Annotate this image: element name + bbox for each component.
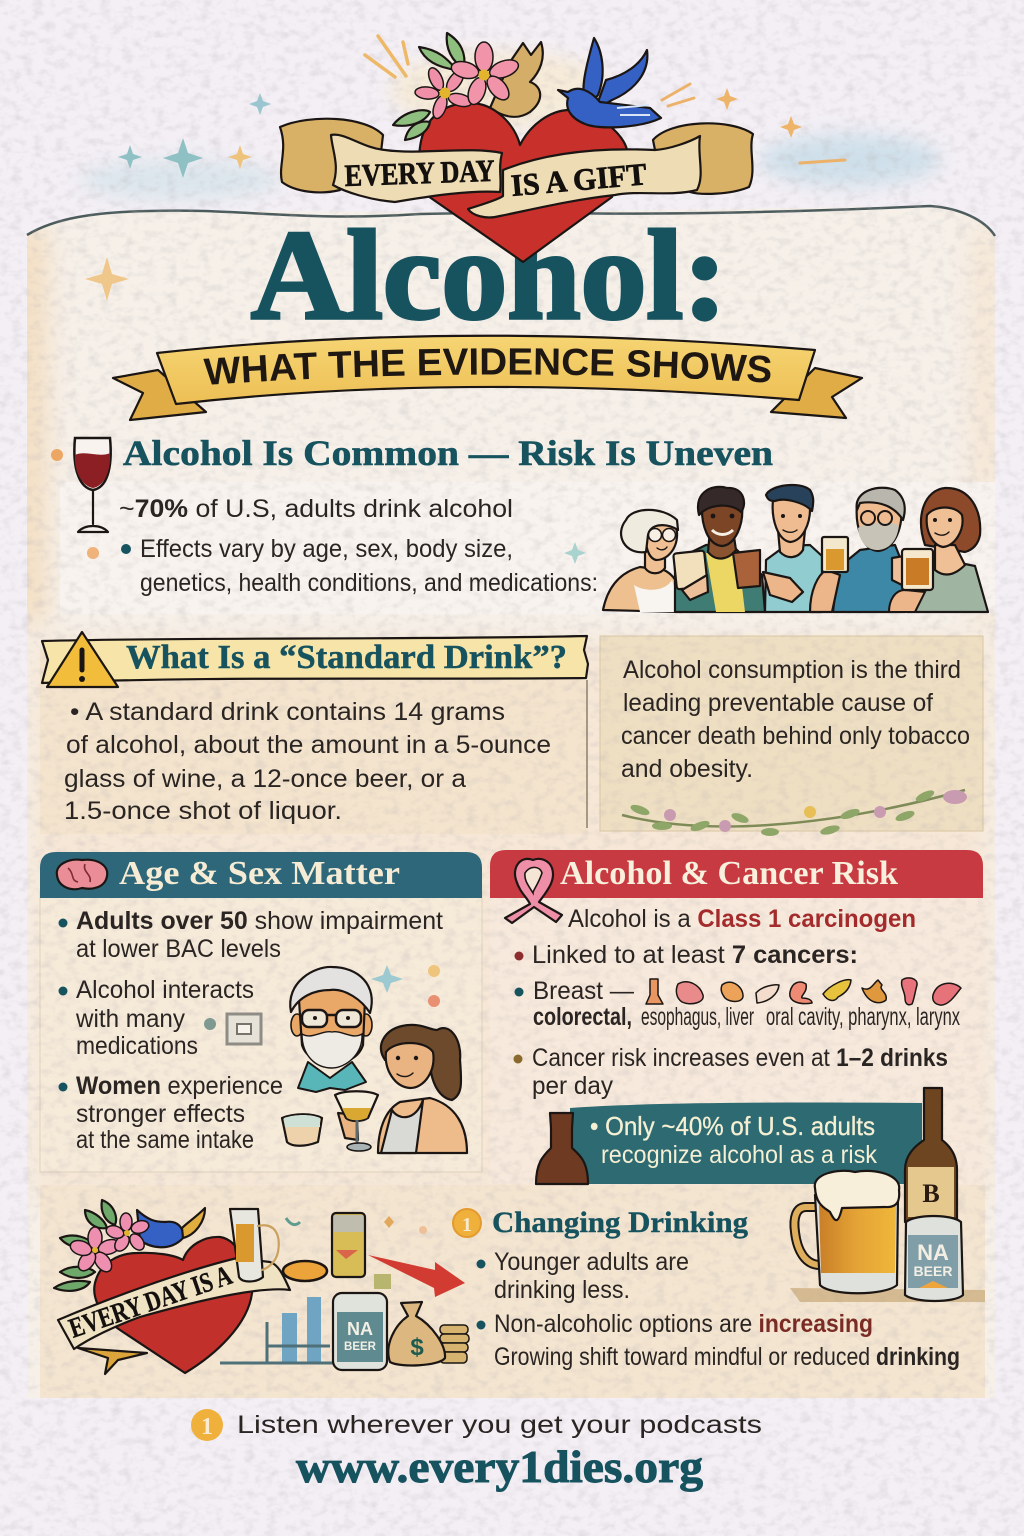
bullet	[476, 1260, 486, 1268]
text: risk increases: Cancer risk increases even at 1–2 drinks	[532, 1044, 948, 1072]
leaves	[54, 1200, 116, 1291]
beer mug	[794, 1171, 899, 1293]
lower page background band	[0, 1398, 1024, 1536]
body line one: • A standard drink contains 14 grams	[70, 698, 505, 726]
icon: coin	[191, 1409, 223, 1441]
text: non-alcoholic: Non-alcoholic options are increasing	[494, 1310, 873, 1338]
NA beer can	[905, 1216, 963, 1301]
NA beer can: NA	[917, 1240, 949, 1265]
panel: standard drink body	[40, 650, 588, 834]
text: growing shift: Growing shift toward mindful or reduced drinking	[494, 1343, 960, 1371]
money bag	[388, 1302, 445, 1365]
text: women: Women experience	[76, 1072, 283, 1100]
icon: coin	[453, 1209, 481, 1237]
ribbon segment right	[468, 136, 701, 217]
section: standard drink	[42, 632, 588, 825]
leaves	[393, 33, 464, 140]
heading ribbon	[42, 636, 588, 683]
icon: pill box	[204, 1014, 261, 1044]
body line four: 1.5-once shot of liquor.	[64, 797, 342, 825]
blue bird	[558, 38, 661, 127]
vertical divider	[586, 680, 588, 828]
jar	[332, 1213, 365, 1277]
text: per day: per day	[532, 1072, 613, 1100]
text: esophagus liver: esophagus, liver	[641, 1003, 754, 1031]
icon: warning triangle	[47, 632, 118, 687]
text: stronger: stronger effects	[76, 1100, 245, 1128]
icon: pink ribbon	[505, 859, 562, 923]
callout: forty percent	[570, 1103, 922, 1184]
emblem: heart, flowers, bird and ribbon	[280, 33, 753, 262]
icon: small cup	[282, 1114, 322, 1146]
text: same intake: at the same intake	[76, 1126, 254, 1154]
podcast line: Listen wherever you get your podcasts	[237, 1411, 762, 1439]
gold wing behind flowers	[490, 42, 543, 117]
ribbon	[58, 1258, 290, 1349]
NA beer can	[333, 1293, 387, 1370]
callout: forty percent: • Only ~40% of U.S. adults	[590, 1111, 875, 1141]
ribbon text: EVERY DAY IS A	[65, 1260, 237, 1345]
illustration: bottle, mug and NA can	[790, 1088, 985, 1302]
heading: Changing Drinking	[492, 1206, 748, 1239]
bullet	[514, 1054, 522, 1064]
effects line one: Effects vary by age, sex, body size,	[140, 535, 513, 563]
illustration: woman with martini	[335, 1025, 467, 1153]
illustration: tattoo heart with drinks	[54, 1200, 469, 1374]
bullet two	[58, 986, 68, 996]
heading text: Age & Sex Matter	[119, 855, 400, 892]
bar chart	[220, 1297, 335, 1363]
callout: forty percent: recognize alcohol as a risk	[601, 1141, 877, 1169]
line two: leading preventable cause of	[623, 689, 933, 717]
subtitle ribbon	[112, 334, 864, 422]
NA beer can: BEER	[914, 1263, 952, 1279]
flowers	[68, 1213, 150, 1275]
line one: Alcohol consumption is the third	[623, 656, 961, 684]
bullet one	[58, 918, 68, 928]
icon: wine glass	[74, 438, 111, 532]
line four: and obesity.	[621, 755, 753, 783]
right bottle	[905, 1088, 957, 1222]
right rear scroll	[653, 123, 753, 194]
text: seven cancers: Linked to at least 7 cancers:	[532, 941, 858, 969]
panel: changing drinking	[40, 1185, 985, 1398]
coins	[440, 1325, 469, 1363]
section: age and sex matter	[40, 852, 482, 1154]
body line three: glass of wine, a 12-once beer, or a	[64, 765, 466, 793]
heart	[94, 1237, 252, 1373]
icon: brain	[57, 860, 107, 889]
line three: cancer death behind only tobacco	[621, 722, 970, 750]
right bottle: B	[922, 1179, 940, 1208]
callout: third leading cause	[621, 656, 970, 836]
panel: age and sex body	[40, 892, 482, 1172]
text: colorectal: colorectal,	[533, 1003, 632, 1031]
NA beer can: BEER	[344, 1341, 377, 1353]
bullet	[514, 952, 524, 960]
teal heading bar	[40, 852, 482, 898]
bullet	[476, 1320, 486, 1330]
text: younger adults: Younger adults are	[494, 1248, 689, 1276]
left rear scroll	[280, 119, 383, 192]
panel: section one wash	[60, 482, 995, 614]
stat line: ~70% of U.S, adults drink alcohol	[119, 495, 513, 523]
effects line two: genetics, health conditions, and medications:	[140, 569, 598, 597]
icon: coin: 1	[462, 1214, 472, 1236]
warm edge wash	[15, 225, 995, 1200]
money bag: $	[410, 1334, 424, 1361]
bullet	[514, 988, 524, 996]
text: with many: with many	[75, 1005, 185, 1033]
text: medications: medications	[76, 1032, 198, 1060]
person: woman with brown hair	[889, 488, 988, 612]
text: interacts: Alcohol interacts	[76, 976, 254, 1004]
illustration: older man	[290, 967, 372, 1092]
panel top edge line	[27, 206, 995, 236]
person: older woman	[603, 510, 682, 612]
glass	[230, 1209, 263, 1282]
section: alcohol is common	[74, 433, 773, 597]
text: class one carcinogen: Alcohol is a Class 1 carcinogen	[568, 905, 916, 933]
body line two: of alcohol, about the amount in a 5-ounce	[66, 731, 551, 759]
heading text: What Is a “Standard Drink”?	[126, 639, 567, 676]
panel: third leading cause	[600, 636, 983, 831]
subtitle text: WHAT THE EVIDENCE SHOWS	[203, 348, 770, 384]
heading: Alcohol Is Common — Risk Is Uneven	[123, 433, 773, 473]
icon: coin: 1	[201, 1414, 213, 1440]
flower left	[415, 66, 473, 120]
panel: cancer risk body	[490, 892, 983, 1184]
parchment main panel	[27, 206, 995, 1400]
small confetti	[286, 1216, 427, 1289]
bird	[137, 1210, 183, 1247]
sparkle stars	[51, 36, 845, 1007]
bullet three	[58, 1082, 68, 1092]
ribbon tail	[78, 1348, 147, 1374]
red heading bar	[490, 850, 983, 898]
title: Alcohol:	[251, 204, 727, 346]
bullet	[121, 544, 131, 554]
ribbon text right: IS A GIFT	[510, 156, 648, 203]
sky wash behind header	[80, 50, 940, 200]
website: www.every1dies.org	[296, 1442, 704, 1492]
person: bearded man	[810, 488, 905, 612]
person: young man	[763, 485, 822, 612]
icon: left bottle	[536, 1113, 588, 1184]
plate	[283, 1261, 327, 1281]
text: breast: Breast —	[533, 977, 634, 1005]
section: changing drinking	[54, 1200, 960, 1374]
footer	[191, 1409, 762, 1492]
heading text: Alcohol & Cancer Risk	[560, 855, 898, 892]
heart	[419, 103, 627, 262]
NA beer can: NA	[347, 1319, 373, 1339]
text: adults over 50: Adults over 50 show impairment	[76, 907, 443, 935]
text: lower BAC: at lower BAC levels	[76, 935, 281, 963]
ribbon text left: EVERY DAY	[344, 153, 495, 193]
shadow	[790, 1288, 985, 1302]
text: drinking less: drinking less.	[494, 1276, 630, 1304]
section: alcohol and cancer risk	[490, 850, 983, 1184]
illustration: five people toasting	[603, 485, 988, 612]
icons: organs row	[646, 978, 961, 1005]
person: man in teal jacket	[673, 487, 765, 612]
floral garland	[622, 788, 967, 836]
flower right	[449, 42, 521, 107]
arrow: trending down	[368, 1255, 465, 1297]
ribbon segment left	[331, 135, 502, 202]
